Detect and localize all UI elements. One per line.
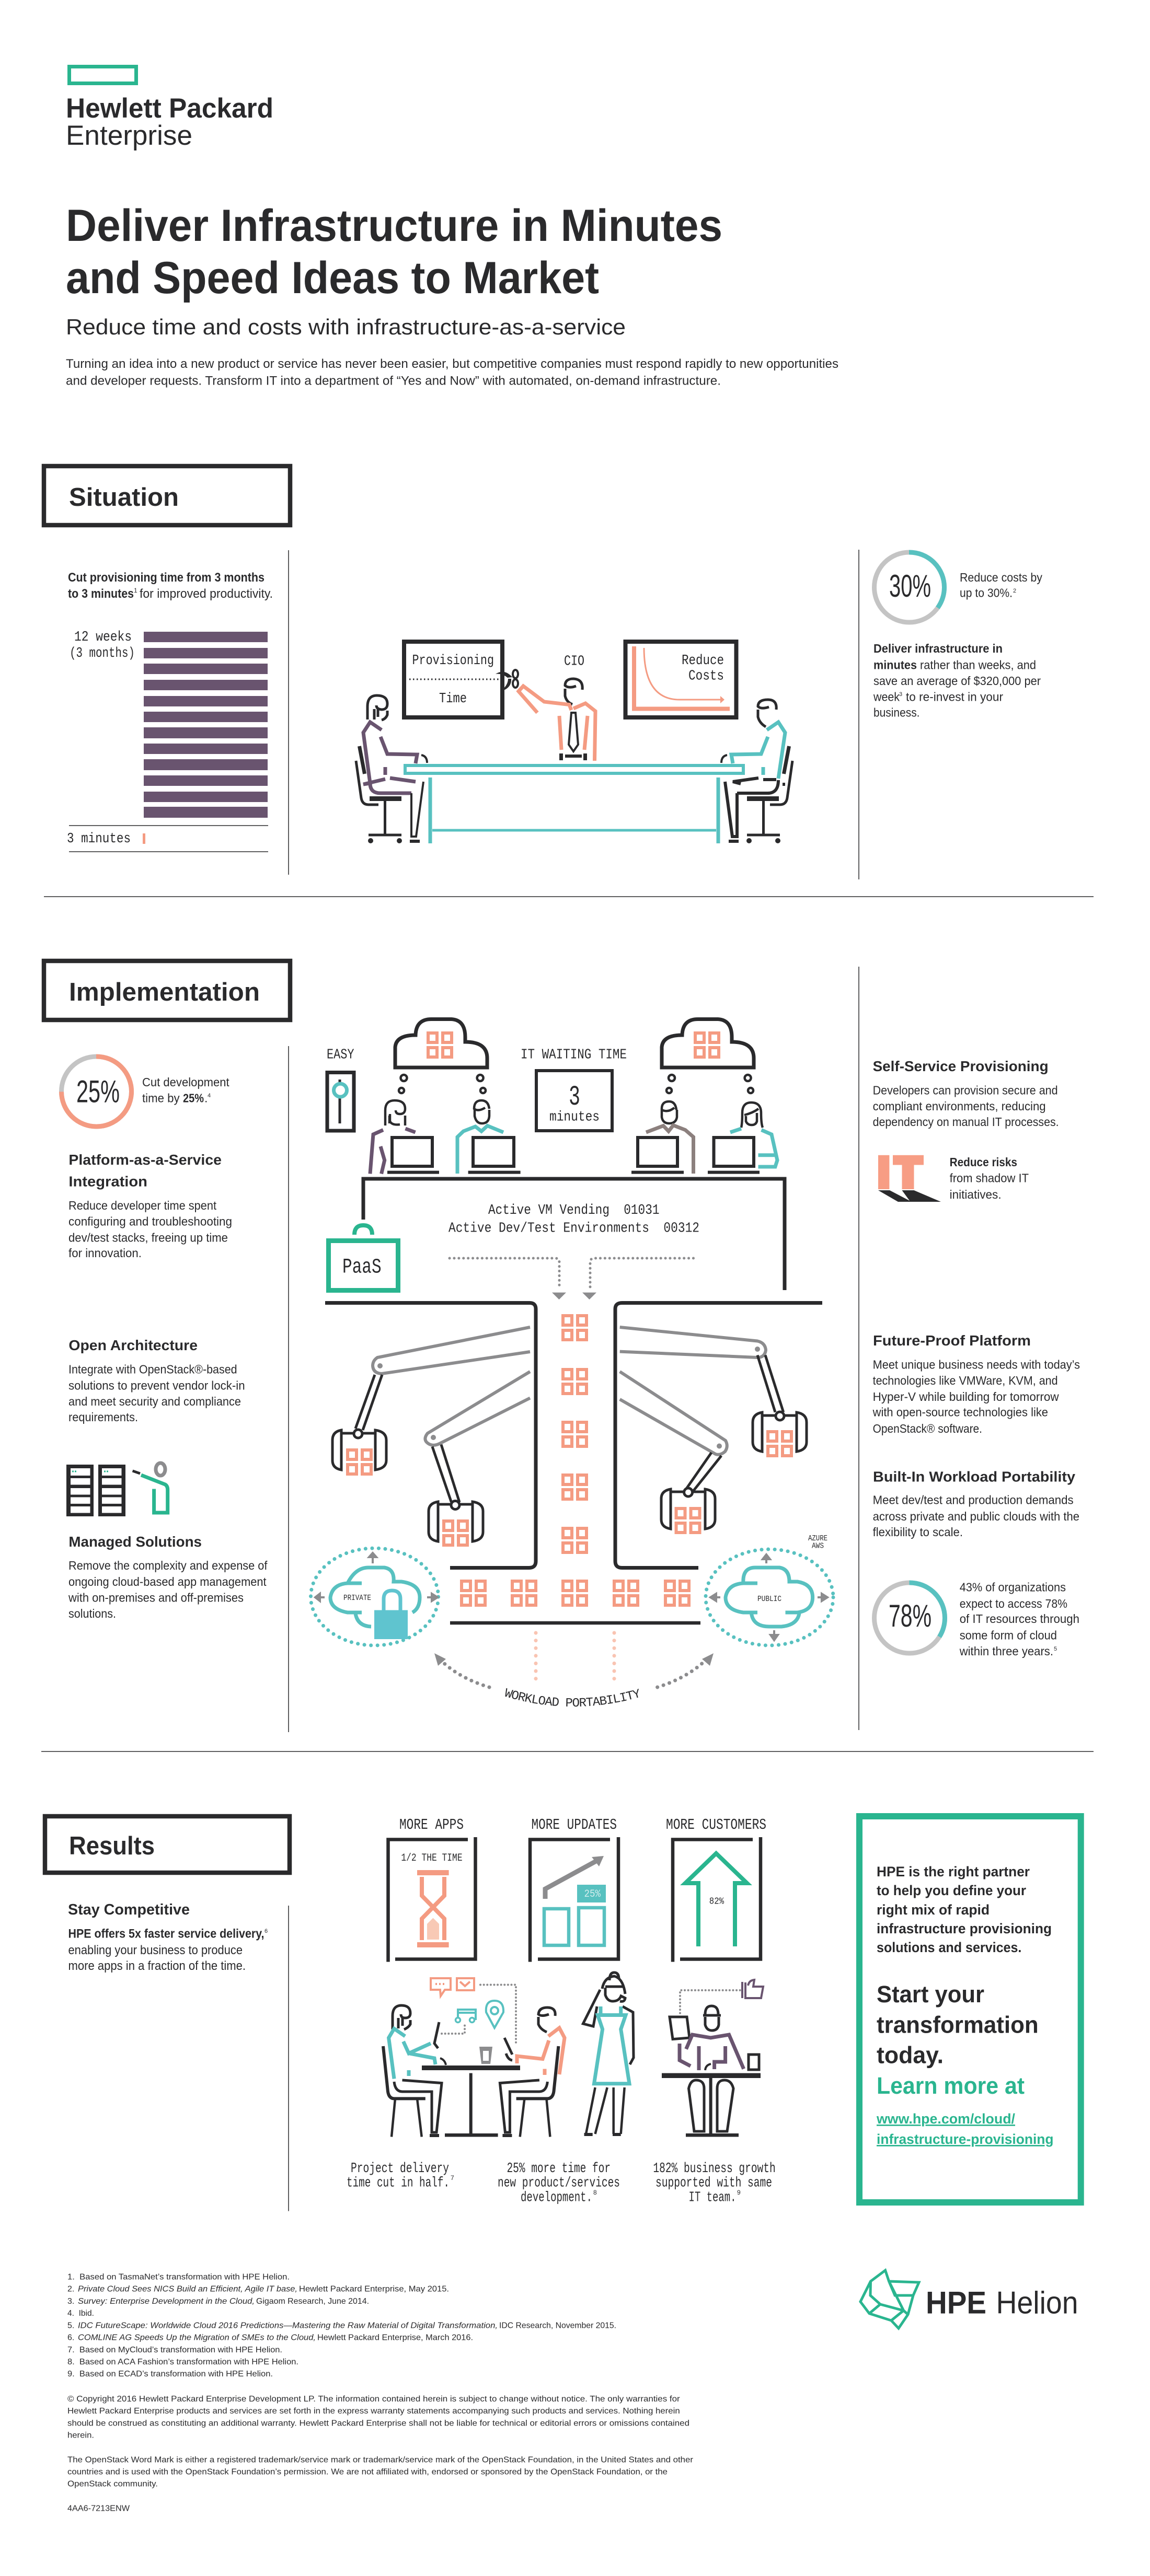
heading: Results (45, 1816, 290, 1873)
callout: call to action: HPE is the right partner (877, 1864, 1030, 1879)
footnotes: Hewlett Packard Enterprise, May 2015. (299, 2284, 449, 2294)
text: Managed Solutions: solutions. (68, 1607, 116, 1620)
panel: reduce costs: up to 30%. (960, 586, 1013, 600)
heading: Implementation (44, 961, 290, 1020)
text: Built-In Workload Portability: flexibility to scale. (873, 1525, 963, 1539)
dotted arrows into funnel (450, 1258, 693, 1299)
figure: CIO (519, 679, 595, 761)
legal text: should be construed as constituting an additional warranty. Hewlett Packard Enterprise shall not be liable for technical or editorial errors or omissions contained (67, 2419, 689, 2428)
arrows: workload portability: WORKLOAD PORTABILITY (505, 1688, 639, 1707)
panel: left implementation features: time by (142, 1091, 180, 1105)
panel: more customers (666, 1816, 766, 1962)
panel: more customers: MORE CUSTOMERS (666, 1816, 766, 1834)
panel: provisioning time comparison (67, 571, 273, 852)
footnotes: 6. (67, 2334, 74, 2342)
title: Deliver Infrastructure in Minutes (66, 201, 722, 251)
captions: results statistics: supported with same (656, 2175, 772, 2191)
cloud: private: PRIVATE (343, 1594, 371, 1603)
panel: reduce costs: save an average of $320,000 per (873, 674, 1041, 688)
logo: HPE Helion: HPE (926, 2285, 986, 2320)
legal text (67, 2395, 694, 2513)
text: Open Architecture: Integrate with OpenStack®-based (68, 1363, 237, 1376)
cafe table (422, 2066, 520, 2137)
title: and Speed Ideas to Market (66, 253, 599, 303)
box: PaaS (328, 1225, 398, 1291)
legal text: OpenStack community. (67, 2480, 158, 2489)
footnotes: 3. (67, 2297, 74, 2306)
text: Managed Solutions (68, 1534, 268, 1620)
text: Managed Solutions: Managed Solutions (68, 1534, 202, 1550)
board: reduce costs chart: Reduce (682, 653, 724, 669)
footnotes: 2. (67, 2284, 74, 2294)
panel: self-service developers illustration: EASY (327, 1047, 354, 1063)
captions: results statistics: 9 (737, 2189, 741, 2196)
figure: developer 3 (646, 1101, 693, 1174)
text: cloud access statistic: expect to access 78% (960, 1597, 1067, 1610)
chart: automated workload conveyor (309, 1301, 835, 1707)
text: Built-In Workload Portability: Built-In Workload Portability (873, 1469, 1075, 1485)
text: Stay Competitive (68, 1901, 268, 1973)
text: Stay Competitive: enabling your business to produce (68, 1943, 243, 1957)
callout: call to action: infrastructure-provisioning (877, 2131, 1054, 2147)
donut: 78% (874, 1583, 945, 1653)
donut: 25%: 25% (76, 1074, 120, 1109)
text: Self-Service Provisioning (873, 1058, 1059, 1129)
illustration: coffee shop table scene (383, 1972, 763, 2137)
callout: call to action: Start your (877, 1981, 984, 2008)
text: Built-In Workload Portability: Meet dev/test and production demands (873, 1493, 1074, 1507)
text: Platform-as-a-Service Integration: Platform-as-a-Service (68, 1152, 222, 1168)
text: Future-Proof Platform: OpenStack® software. (873, 1422, 982, 1435)
footnotes: 4. Ibid. (67, 2309, 94, 2318)
cloud: private (310, 1548, 438, 1645)
text: Self-Service Provisioning: compliant environments, reducing (873, 1099, 1046, 1113)
text: Future-Proof Platform: technologies like VMWare, KVM, and (873, 1374, 1058, 1387)
robot arm 1 (332, 1327, 530, 1474)
panel: provisioning time comparison: for improved productivity. (140, 587, 273, 601)
text: Platform-as-a-Service Integration: configuring and troubleshooting (68, 1214, 232, 1228)
legal text: countries and is used with the OpenStack Foundation’s permission. We are not affiliated with, endorsed or sponsored by the OpenStack Foundation, or the (67, 2468, 668, 2477)
callout: call to action: www.hpe.com/cloud/ (876, 2111, 1015, 2127)
platform console (363, 1179, 785, 1290)
intro text block: and developer requests. Transform IT into a department of “Yes and Now” with automated, on-demand infrastructure. (66, 374, 721, 388)
laptops (387, 1138, 760, 1174)
robot arm 2 (425, 1372, 530, 1545)
captions: results statistics: Project delivery (351, 2161, 449, 2177)
text: Future-Proof Platform (872, 1332, 1080, 1435)
text: cloud access statistic: 43% of organizations (960, 1580, 1066, 1594)
cloud: public: AZURE (808, 1534, 827, 1543)
captions: results statistics: IT team. (689, 2190, 736, 2206)
footnotes: 1. Based on TasmaNet’s transformation with HPE Helion. (67, 2273, 290, 2281)
dotted salmon supports (536, 1633, 614, 1679)
figure: woman with phone (383, 2005, 446, 2137)
callout: call to action: to help you define your (877, 1883, 1026, 1898)
footnotes: 5. (67, 2321, 74, 2330)
text: Managed Solutions: Remove the complexity and expense of (68, 1559, 268, 1572)
captions: results statistics: new product/services (498, 2175, 620, 2191)
text: Self-Service Provisioning: Developers can provision secure and (873, 1084, 1058, 1097)
panel: provisioning time comparison: to 3 minutes (68, 587, 134, 601)
intro text block (66, 357, 838, 388)
panel: more apps: MORE APPS (399, 1816, 464, 1834)
captions: results statistics (347, 2161, 776, 2206)
text: Self-Service Provisioning: Self-Service Provisioning (873, 1058, 1049, 1074)
logo: Hewlett Packard Enterprise (66, 67, 273, 151)
panel: reduce costs: 3 (899, 691, 902, 698)
logo: HPE Helion (860, 2270, 1078, 2328)
panel: right implementation features: initiatives. (950, 1188, 1002, 1201)
footnotes (67, 2273, 616, 2378)
box: 3 minutes: 3 (569, 1082, 580, 1113)
callout: call to action: solutions and services. (877, 1940, 1021, 1955)
panel: reduce costs: minutes (873, 658, 917, 672)
text: Open Architecture: and meet security and compliance (68, 1395, 241, 1408)
text: Platform-as-a-Service Integration: Integration (68, 1174, 147, 1190)
panel: reduce costs: week (873, 690, 900, 704)
cloud: public (706, 1534, 833, 1645)
text: Open Architecture (68, 1337, 245, 1424)
legal text: 4AA6-7213ENW (67, 2504, 130, 2513)
heading: Results: Results (69, 1832, 155, 1860)
cloud: public: AWS (812, 1542, 824, 1551)
text: Platform-as-a-Service Integration: Reduce developer time spent (68, 1199, 217, 1212)
text: Future-Proof Platform: Hyper-V while building for tomorrow (873, 1390, 1059, 1403)
callout: call to action: transformation (877, 2012, 1039, 2038)
box: 3 minutes (536, 1071, 612, 1131)
callout: call to action: right mix of rapid (877, 1902, 990, 1918)
icon: scissors (496, 670, 518, 690)
captions: results statistics: 25% more time for (507, 2161, 611, 2177)
board: reduce costs chart (625, 642, 736, 717)
logo: HPE Helion: Helion (996, 2285, 1078, 2320)
legal text: Hewlett Packard Enterprise products and services are set forth in the express warranty statements accompanying such products and services. Nothing herein (67, 2407, 680, 2416)
panel: left implementation features: 25% (183, 1091, 204, 1105)
intro text block: Turning an idea into a new product or service has never been easier, but competitive companies must respond rapidly to new opportunities (66, 357, 838, 371)
donut: 78%: 78% (889, 1598, 932, 1633)
cloud: public: PUBLIC (757, 1595, 781, 1604)
panel: reduce costs: rather than weeks, and (920, 658, 1036, 672)
heading: Situation (44, 466, 290, 525)
figure: woman seated left (356, 695, 427, 843)
cloud right with workload (662, 1019, 754, 1067)
icon: IT shadow (878, 1155, 941, 1202)
icon: music note (456, 2010, 476, 2022)
callout: call to action: Learn more at (877, 2072, 1025, 2099)
bar chart: 12 weeks vs 3 minutes (67, 630, 268, 852)
board: provisioning time: Time (439, 691, 467, 707)
icon: map pin (486, 2001, 503, 2028)
panel: right implementation features (872, 1058, 1080, 1658)
legal text: The OpenStack Word Mark is either a registered trademark/service mark or trademark/service mark of the OpenStack Foundation, in the United States and other (67, 2456, 694, 2465)
arrows: workload portability (434, 1653, 714, 1707)
panel: meeting illustration with CIO: CIO (564, 654, 584, 670)
donut: 30% (874, 552, 944, 622)
text: Built-In Workload Portability: across private and public clouds with the (873, 1510, 1079, 1523)
heading: Situation: Situation (69, 483, 179, 512)
legal text: herein. (67, 2431, 94, 2440)
panel: more apps: 1/2 THE TIME (401, 1852, 463, 1864)
robot arm 3 (620, 1327, 807, 1456)
icon: slider (327, 1072, 354, 1131)
footnotes: IDC FutureScape: Worldwide Cloud 2016 Predictions—Mastering the Raw Material of Digital Transformation, (78, 2321, 498, 2330)
panel: reduce costs: 2 (1013, 588, 1016, 594)
text: Stay Competitive: Stay Competitive (68, 1901, 190, 1918)
text: cloud access statistic: some form of cloud (960, 1628, 1057, 1642)
panel: left implementation features: 4 (208, 1093, 211, 1099)
text: Open Architecture: solutions to prevent vendor lock-in (68, 1379, 245, 1393)
panel: left implementation features (62, 1057, 268, 1620)
panel: provisioning time comparison: 1 (134, 587, 137, 594)
text: Built-In Workload Portability (873, 1469, 1079, 1539)
panel: reduce costs (873, 552, 1042, 720)
text: Future-Proof Platform: with open-source technologies like (872, 1406, 1048, 1419)
board: provisioning time (404, 642, 502, 717)
panel: more updates: MORE UPDATES (531, 1816, 617, 1834)
footnotes: Hewlett Packard Enterprise, March 2016. (317, 2334, 473, 2342)
workload blocks (462, 1316, 689, 1605)
panel: provisioning time comparison: Cut provisioning time from 3 months (68, 571, 264, 585)
panel: more apps (388, 1816, 476, 1962)
captions: results statistics: 182% business growth (653, 2161, 776, 2177)
icon: server racks with technician (66, 1463, 168, 1516)
panel: left implementation features: Cut development (142, 1075, 229, 1089)
panel: reduce costs: to re-invest in your (906, 690, 1003, 704)
panel: reduce costs: Deliver infrastructure in (873, 642, 1003, 655)
figure: customer with tablet (662, 1980, 763, 2137)
bar chart: 12 weeks vs 3 minutes: 12 weeks (74, 630, 132, 645)
board: provisioning time: Provisioning (412, 653, 494, 669)
platform console: Active VM Vending 01031 (488, 1203, 660, 1219)
footnotes: IDC Research, November 2015. (499, 2321, 616, 2330)
footnotes: Survey: Enterprise Development in the Cloud, (78, 2297, 255, 2306)
platform console: Active Dev/Test Environments 00312 (448, 1221, 699, 1237)
text: cloud access statistic: 5 (1054, 1646, 1057, 1652)
figure: developer 2 (457, 1100, 503, 1174)
panel: right implementation features: Reduce risks (950, 1155, 1017, 1169)
funnel walls (325, 1303, 822, 1623)
donut: 25% (62, 1057, 132, 1127)
text: cloud access statistic: within three years. (959, 1644, 1053, 1658)
text: Platform-as-a-Service Integration (68, 1152, 232, 1260)
panel: meeting illustration with CIO (356, 642, 792, 843)
callout: call to action (859, 1816, 1081, 2202)
figure: man seated right (721, 700, 792, 843)
text: Platform-as-a-Service Integration: dev/test stacks, freeing up time (68, 1231, 228, 1245)
text: Self-Service Provisioning: dependency on manual IT processes. (873, 1115, 1059, 1129)
text: Managed Solutions: with on-premises and off-premises (68, 1591, 244, 1605)
text: Stay Competitive: 6 (264, 1928, 268, 1934)
table (405, 765, 743, 843)
text: Stay Competitive: more apps in a fraction of the time. (68, 1959, 246, 1973)
cloud left with workload (395, 1019, 487, 1067)
figure: developer 1 (370, 1100, 416, 1174)
icon: hourglass (417, 1870, 449, 1947)
box: PaaS: PaaS (342, 1256, 382, 1280)
text: Managed Solutions: ongoing cloud-based app management (68, 1575, 267, 1588)
icon: cup (479, 2047, 492, 2064)
text: Future-Proof Platform: Future-Proof Platform (873, 1332, 1031, 1349)
footnotes: 9. Based on ECAD’s transformation with HPE Helion. (67, 2370, 273, 2378)
callout: call to action: today. (877, 2042, 944, 2069)
panel: more updates (530, 1816, 618, 1962)
captions: results statistics: 7 (451, 2174, 454, 2182)
heading: Implementation: Implementation (69, 978, 260, 1006)
callout: call to action: infrastructure provisioning (877, 1921, 1052, 1936)
text: Open Architecture: Open Architecture (68, 1337, 198, 1353)
figure: man with phone (500, 2008, 565, 2137)
panel: more updates: 25% (584, 1888, 601, 1900)
text: cloud access statistic (959, 1580, 1079, 1658)
title (66, 201, 722, 303)
text: Platform-as-a-Service Integration: for innovation. (68, 1246, 142, 1260)
box: 3 minutes: minutes (549, 1110, 600, 1125)
text: Open Architecture: requirements. (68, 1410, 138, 1424)
subtitle: Reduce time and costs with infrastructure-as-a-service (66, 315, 626, 339)
footnotes: Gigaom Research, June 2014. (256, 2297, 369, 2306)
panel: self-service developers illustration: IT WAITING TIME (521, 1047, 627, 1063)
figure: barista on phone (583, 1972, 634, 2134)
donut: 30%: 30% (889, 568, 931, 604)
panel: reduce costs: business. (873, 706, 920, 720)
board: reduce costs chart: Costs (688, 669, 724, 684)
panel: left implementation features: . (204, 1091, 208, 1105)
text: Stay Competitive: HPE offers 5x faster service delivery, (68, 1927, 264, 1941)
captions: results statistics: time cut in half. (347, 2175, 450, 2191)
panel: self-service developers illustration (327, 1019, 785, 1299)
panel: right implementation features: from shadow IT (950, 1171, 1029, 1185)
panel: more customers: 82% (709, 1897, 724, 1907)
figure: developer 4 (730, 1103, 777, 1167)
bar chart: 12 weeks vs 3 minutes: (3 months) (70, 646, 135, 662)
text: cloud access statistic: of IT resources through (960, 1612, 1079, 1626)
captions: results statistics: 8 (593, 2189, 597, 2196)
footnotes: 7. Based on MyCloud’s transformation with HPE Helion. (67, 2346, 282, 2354)
captions: results statistics: development. (521, 2190, 592, 2206)
robot arm 4 (620, 1372, 727, 1533)
footnotes: COMLINE AG Speeds Up the Migration of SMEs to the Cloud, (78, 2334, 316, 2342)
icons: message and mail (431, 1978, 474, 1996)
logo: Hewlett Packard Enterprise: Hewlett Packard (66, 93, 273, 124)
footnotes: Private Cloud Sees NICS Build an Efficient, Agile IT base, (78, 2284, 297, 2294)
footnotes: 8. Based on ACA Fashion’s transformation with HPE Helion. (67, 2358, 298, 2366)
logo: Hewlett Packard Enterprise: Enterprise (66, 120, 192, 151)
bar chart: 12 weeks vs 3 minutes: 3 minutes (67, 831, 131, 847)
legal text: © Copyright 2016 Hewlett Packard Enterprise Development LP. The information contained herein is subject to change without notice. The only warranties for (67, 2395, 680, 2404)
text: Future-Proof Platform: Meet unique business needs with today’s (873, 1358, 1080, 1372)
panel: reduce costs: Reduce costs by (960, 571, 1042, 584)
